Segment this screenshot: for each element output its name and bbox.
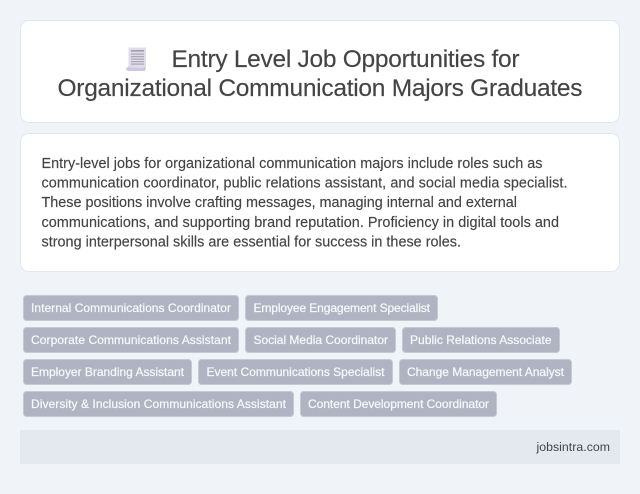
footer (20, 430, 620, 464)
tag: Internal Communications Coordinator: Internal Communications Coordinator (31, 301, 231, 315)
tag: Employee Engagement Specialist (246, 296, 438, 320)
description text: communications, and supporting brand reputation. Proficiency in digital tools and (42, 215, 559, 231)
tag: Employer Branding Assistant (24, 360, 192, 384)
tag: Event Communications Specialist: Event Communications Specialist (206, 365, 385, 379)
tag: Social Media Coordinator: Social Media Coordinator (254, 333, 388, 347)
tag: Employer Branding Assistant: Employer Branding Assistant (31, 365, 185, 379)
tag: Public Relations Associate: Public Relations Associate (410, 333, 552, 347)
title text: Organizational Communication Majors Graduates (58, 75, 582, 102)
panel: description (20, 134, 620, 272)
icon: document scroll (126, 48, 146, 71)
tag: Diversity & Inclusion Communications Assistant: Diversity & Inclusion Communications Assistant (31, 397, 287, 411)
tag: Employee Engagement Specialist: Employee Engagement Specialist (254, 301, 431, 315)
panel: title (20, 20, 620, 122)
description text: These positions involve crafting messages, managing internal and external (42, 195, 517, 211)
footer: jobsintra.com (536, 440, 610, 454)
tag: Change Management Analyst (400, 360, 572, 384)
description text: strong interpersonal skills are essential for success in these roles. (42, 234, 461, 250)
title text: Entry Level Job Opportunities for (172, 46, 520, 73)
tag: Public Relations Associate (402, 328, 560, 352)
title text (58, 46, 582, 102)
tag: Diversity & Inclusion Communications Assistant (24, 392, 294, 416)
tag: Event Communications Specialist (198, 360, 392, 384)
tag: Content Development Coordinator (300, 392, 496, 416)
tag group (24, 296, 572, 416)
description text (42, 156, 568, 250)
tag: Corporate Communications Assistant (24, 328, 238, 352)
description text: Entry-level jobs for organizational communication majors include roles such as (42, 156, 542, 172)
tag: Change Management Analyst: Change Management Analyst (407, 365, 565, 379)
tag: Internal Communications Coordinator (24, 296, 238, 320)
tag: Corporate Communications Assistant: Corporate Communications Assistant (31, 333, 232, 347)
tag: Social Media Coordinator (246, 328, 396, 352)
description text: communication coordinator, public relations assistant, and social media specialist. (42, 176, 568, 192)
tag: Content Development Coordinator: Content Development Coordinator (308, 397, 489, 411)
